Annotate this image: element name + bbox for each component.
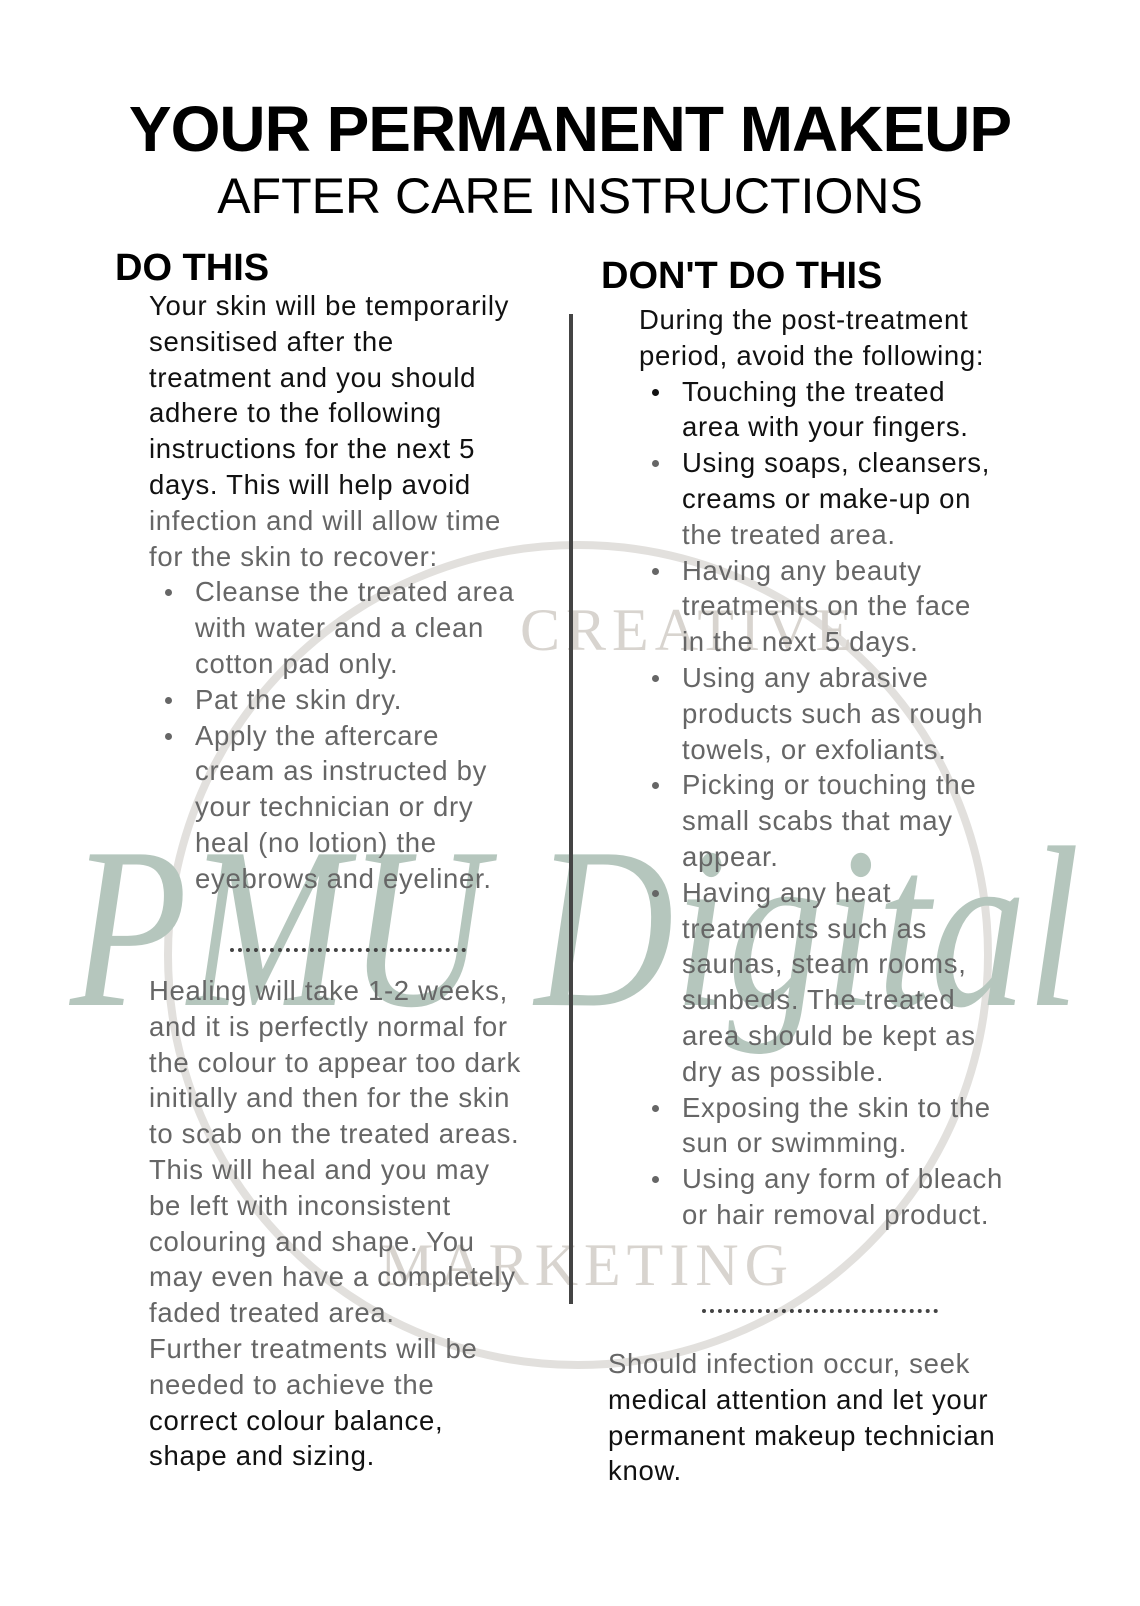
left bullets: Cleanse the treated area (195, 576, 515, 607)
healing text: the colour to appear too dark (149, 1047, 521, 1078)
healing text (149, 975, 521, 1471)
left intro text: for the skin to recover: (149, 541, 438, 572)
left intro text: sensitised after the (149, 326, 394, 357)
right list: sun or swimming. (682, 1127, 907, 1158)
right list: creams or make-up on (682, 483, 971, 514)
right list: period, avoid the following: (639, 340, 984, 371)
infection note: know. (608, 1455, 682, 1486)
right list: Having any heat (682, 877, 891, 908)
healing text: correct colour balance, (149, 1405, 443, 1436)
right list: dry as possible. (682, 1056, 884, 1087)
divider line (569, 314, 573, 1304)
right list: or hair removal product. (682, 1199, 989, 1230)
left bullets: with water and a clean (195, 612, 484, 643)
right list: products such as rough (682, 698, 983, 729)
right list: towels, or exfoliants. (682, 734, 947, 765)
healing text: faded treated area. (149, 1297, 395, 1328)
healing text: and it is perfectly normal for (149, 1011, 508, 1042)
right list: in the next 5 days. (682, 626, 918, 657)
left intro text: instructions for the next 5 (149, 433, 475, 464)
left intro text: Your skin will be temporarily (149, 290, 509, 321)
right list (639, 304, 1003, 1230)
healing text: shape and sizing. (149, 1440, 375, 1471)
healing text: initially and then for the skin (149, 1082, 510, 1113)
subtitle: AFTER CARE INSTRUCTIONS (217, 168, 923, 224)
watermark: CREATIVE (520, 597, 858, 663)
dotted separator left (230, 948, 466, 952)
right list: area should be kept as (682, 1020, 976, 1051)
left intro text: days. This will help avoid (149, 469, 471, 500)
right list: Using any abrasive (682, 662, 928, 693)
right list: Using any form of bleach (682, 1163, 1003, 1194)
left bullets: cream as instructed by (195, 755, 487, 786)
healing text: colouring and shape. You (149, 1226, 475, 1257)
healing text: to scab on the treated areas. (149, 1118, 519, 1149)
right list: treatments on the face (682, 590, 971, 621)
infection note: permanent makeup technician (608, 1420, 995, 1451)
left bullets: your technician or dry (195, 791, 473, 822)
left intro text: adhere to the following (149, 397, 442, 428)
title: YOUR PERMANENT MAKEUP (129, 93, 1011, 165)
dotted separator right (702, 1309, 938, 1313)
left bullets: eyebrows and eyeliner. (195, 863, 492, 894)
infection note: Should infection occur, seek (608, 1348, 970, 1379)
right list: appear. (682, 841, 779, 872)
right list: During the post-treatment (639, 304, 968, 335)
right list: Having any beauty (682, 555, 922, 586)
right list: Using soaps, cleansers, (682, 447, 990, 478)
left intro text: treatment and you should (149, 362, 476, 393)
infection note: medical attention and let your (608, 1384, 988, 1415)
healing text: Healing will take 1-2 weeks, (149, 975, 508, 1006)
right list: sunbeds. The treated (682, 984, 955, 1015)
left bullets (165, 576, 515, 894)
healing text: Further treatments will be (149, 1333, 477, 1364)
left intro text: infection and will allow time (149, 505, 501, 536)
heading: do this: DO THIS (115, 247, 269, 289)
healing text: may even have a completely (149, 1261, 516, 1292)
healing text: This will heal and you may (149, 1154, 490, 1185)
right list: treatments such as (682, 913, 927, 944)
right list: the treated area. (682, 519, 896, 550)
healing text: needed to achieve the (149, 1369, 434, 1400)
right list: small scabs that may (682, 805, 953, 836)
right list: Exposing the skin to the (682, 1092, 991, 1123)
left bullets: Pat the skin dry. (195, 684, 402, 715)
healing text: be left with inconsistent (149, 1190, 451, 1221)
left bullets: cotton pad only. (195, 648, 398, 679)
right list: Touching the treated (682, 376, 945, 407)
watermark: MARKETING (380, 1232, 794, 1298)
left bullets: heal (no lotion) the (195, 827, 437, 858)
left intro text (149, 290, 515, 894)
heading: don't do this: DON'T DO THIS (601, 255, 882, 297)
right list: Picking or touching the (682, 769, 976, 800)
right list: saunas, steam rooms, (682, 948, 967, 979)
right list: area with your fingers. (682, 411, 969, 442)
left bullets: Apply the aftercare (195, 720, 439, 751)
infection note (608, 1348, 995, 1486)
